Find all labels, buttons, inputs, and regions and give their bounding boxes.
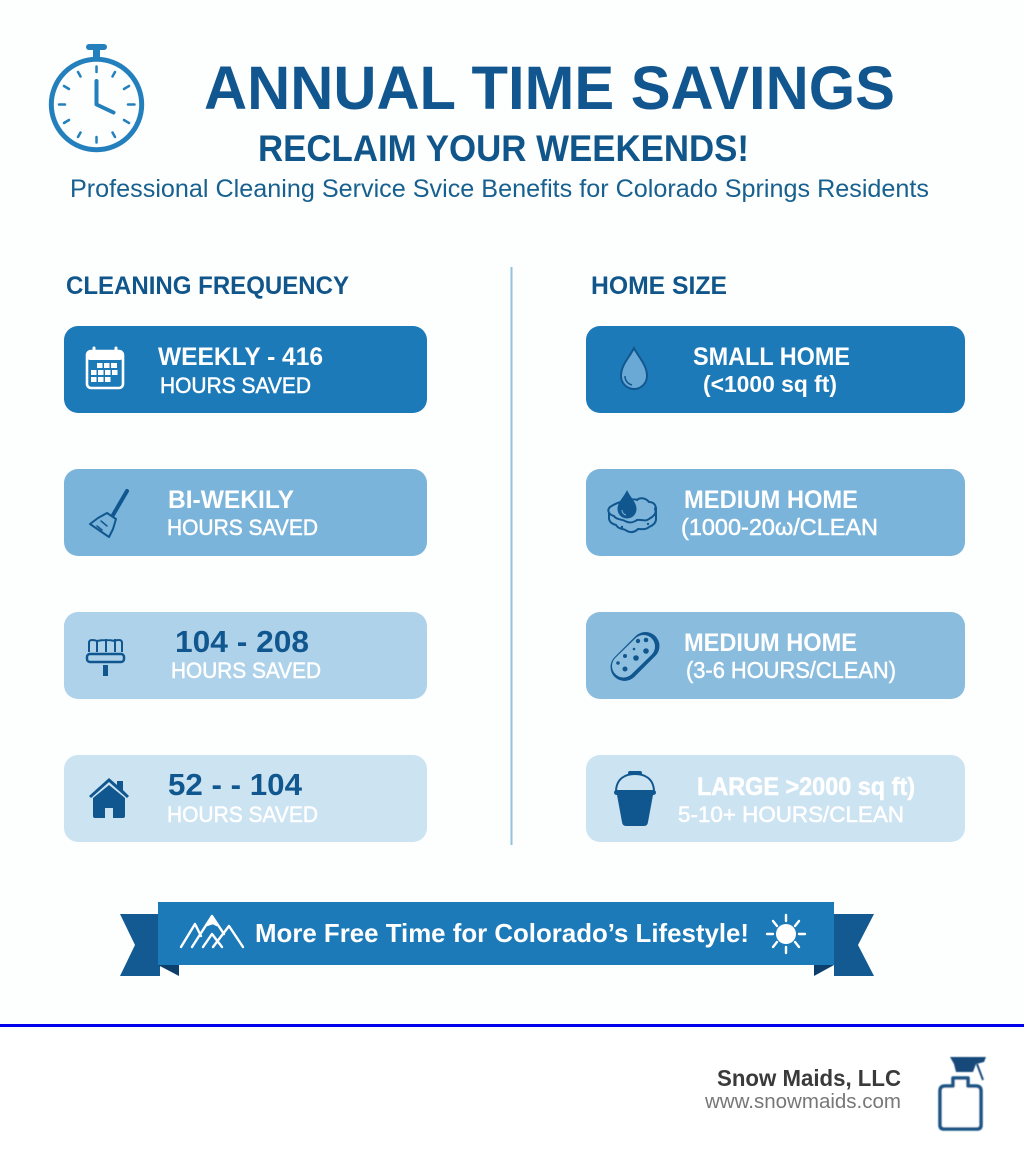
card text: MEDIUM HOME bbox=[684, 486, 858, 514]
icon: mountains bbox=[181, 916, 243, 947]
card text: HOURS SAVED bbox=[167, 515, 318, 540]
card: medium home 2 bbox=[586, 612, 965, 699]
card: small home bbox=[586, 326, 965, 413]
icon: sponge bbox=[616, 638, 649, 672]
card text: BI-WEKILY bbox=[168, 486, 294, 514]
card text bbox=[171, 624, 321, 683]
icon: broom bbox=[90, 491, 127, 537]
card: 104-208 bbox=[64, 612, 427, 699]
icon: house bbox=[89, 778, 129, 818]
card text: 104 - 208 bbox=[175, 624, 309, 659]
card: weekly bbox=[64, 326, 427, 413]
card text: (3-6 HOURS/CLEAN) bbox=[686, 657, 896, 683]
footer brand: www.snowmaids.com bbox=[704, 1091, 901, 1113]
card: large home bbox=[586, 755, 965, 842]
card text bbox=[681, 486, 878, 540]
banner text: More Free Time for Colorado’s Lifestyle! bbox=[255, 918, 749, 948]
icon: brush bbox=[87, 639, 124, 676]
card text: SMALL HOME bbox=[693, 343, 850, 371]
column divider bbox=[510, 267, 512, 845]
footer rule bbox=[0, 1024, 1024, 1027]
card text bbox=[678, 773, 915, 827]
subtitle: RECLAIM YOUR WEEKENDS! bbox=[258, 128, 749, 169]
card text: 5-10+ HOURS/CLEAN bbox=[678, 802, 904, 827]
footer brand: Snow Maids, LLC bbox=[717, 1065, 901, 1091]
card text: (1000-20ω/CLEAN bbox=[681, 514, 878, 540]
card text: HOURS SAVED bbox=[171, 658, 321, 683]
card: medium home 1 bbox=[586, 469, 965, 556]
ribbon banner bbox=[120, 902, 874, 976]
footer brand bbox=[704, 1065, 901, 1113]
card text bbox=[158, 343, 323, 398]
card text bbox=[167, 767, 318, 827]
icon: stopwatch bbox=[51, 44, 142, 150]
card text: LARGE >2000 sq ft) bbox=[697, 773, 915, 801]
card text: MEDIUM HOME bbox=[684, 629, 857, 657]
card text: HOURS SAVED bbox=[160, 373, 311, 398]
card: bi-weekly bbox=[64, 469, 427, 556]
card text: HOURS SAVED bbox=[167, 802, 318, 827]
card text bbox=[684, 629, 896, 683]
card text: 52 - - 104 bbox=[168, 767, 303, 802]
card text: WEEKLY - 416 bbox=[158, 343, 323, 371]
card text bbox=[167, 486, 318, 540]
title: ANNUAL TIME SAVINGS bbox=[204, 54, 895, 122]
icon: spray bottle bbox=[940, 1057, 986, 1129]
icon: calendar bbox=[87, 348, 123, 388]
heading: home size: HOME SIZE bbox=[591, 272, 727, 300]
icon: water drop bbox=[621, 348, 647, 389]
icon: bucket bbox=[614, 771, 656, 826]
ribbon tails bbox=[120, 914, 874, 976]
icon: sponge with drop bbox=[608, 490, 656, 532]
card text: (<1000 sq ft) bbox=[703, 371, 837, 397]
card: 52-104 bbox=[64, 755, 427, 842]
tagline: Professional Cleaning Service Svice Benefits for Colorado Springs Residents bbox=[70, 175, 929, 203]
card text bbox=[693, 343, 850, 397]
heading: cleaning frequency: CLEANING FREQUENCY bbox=[66, 272, 349, 300]
icon: sun bbox=[767, 915, 805, 953]
